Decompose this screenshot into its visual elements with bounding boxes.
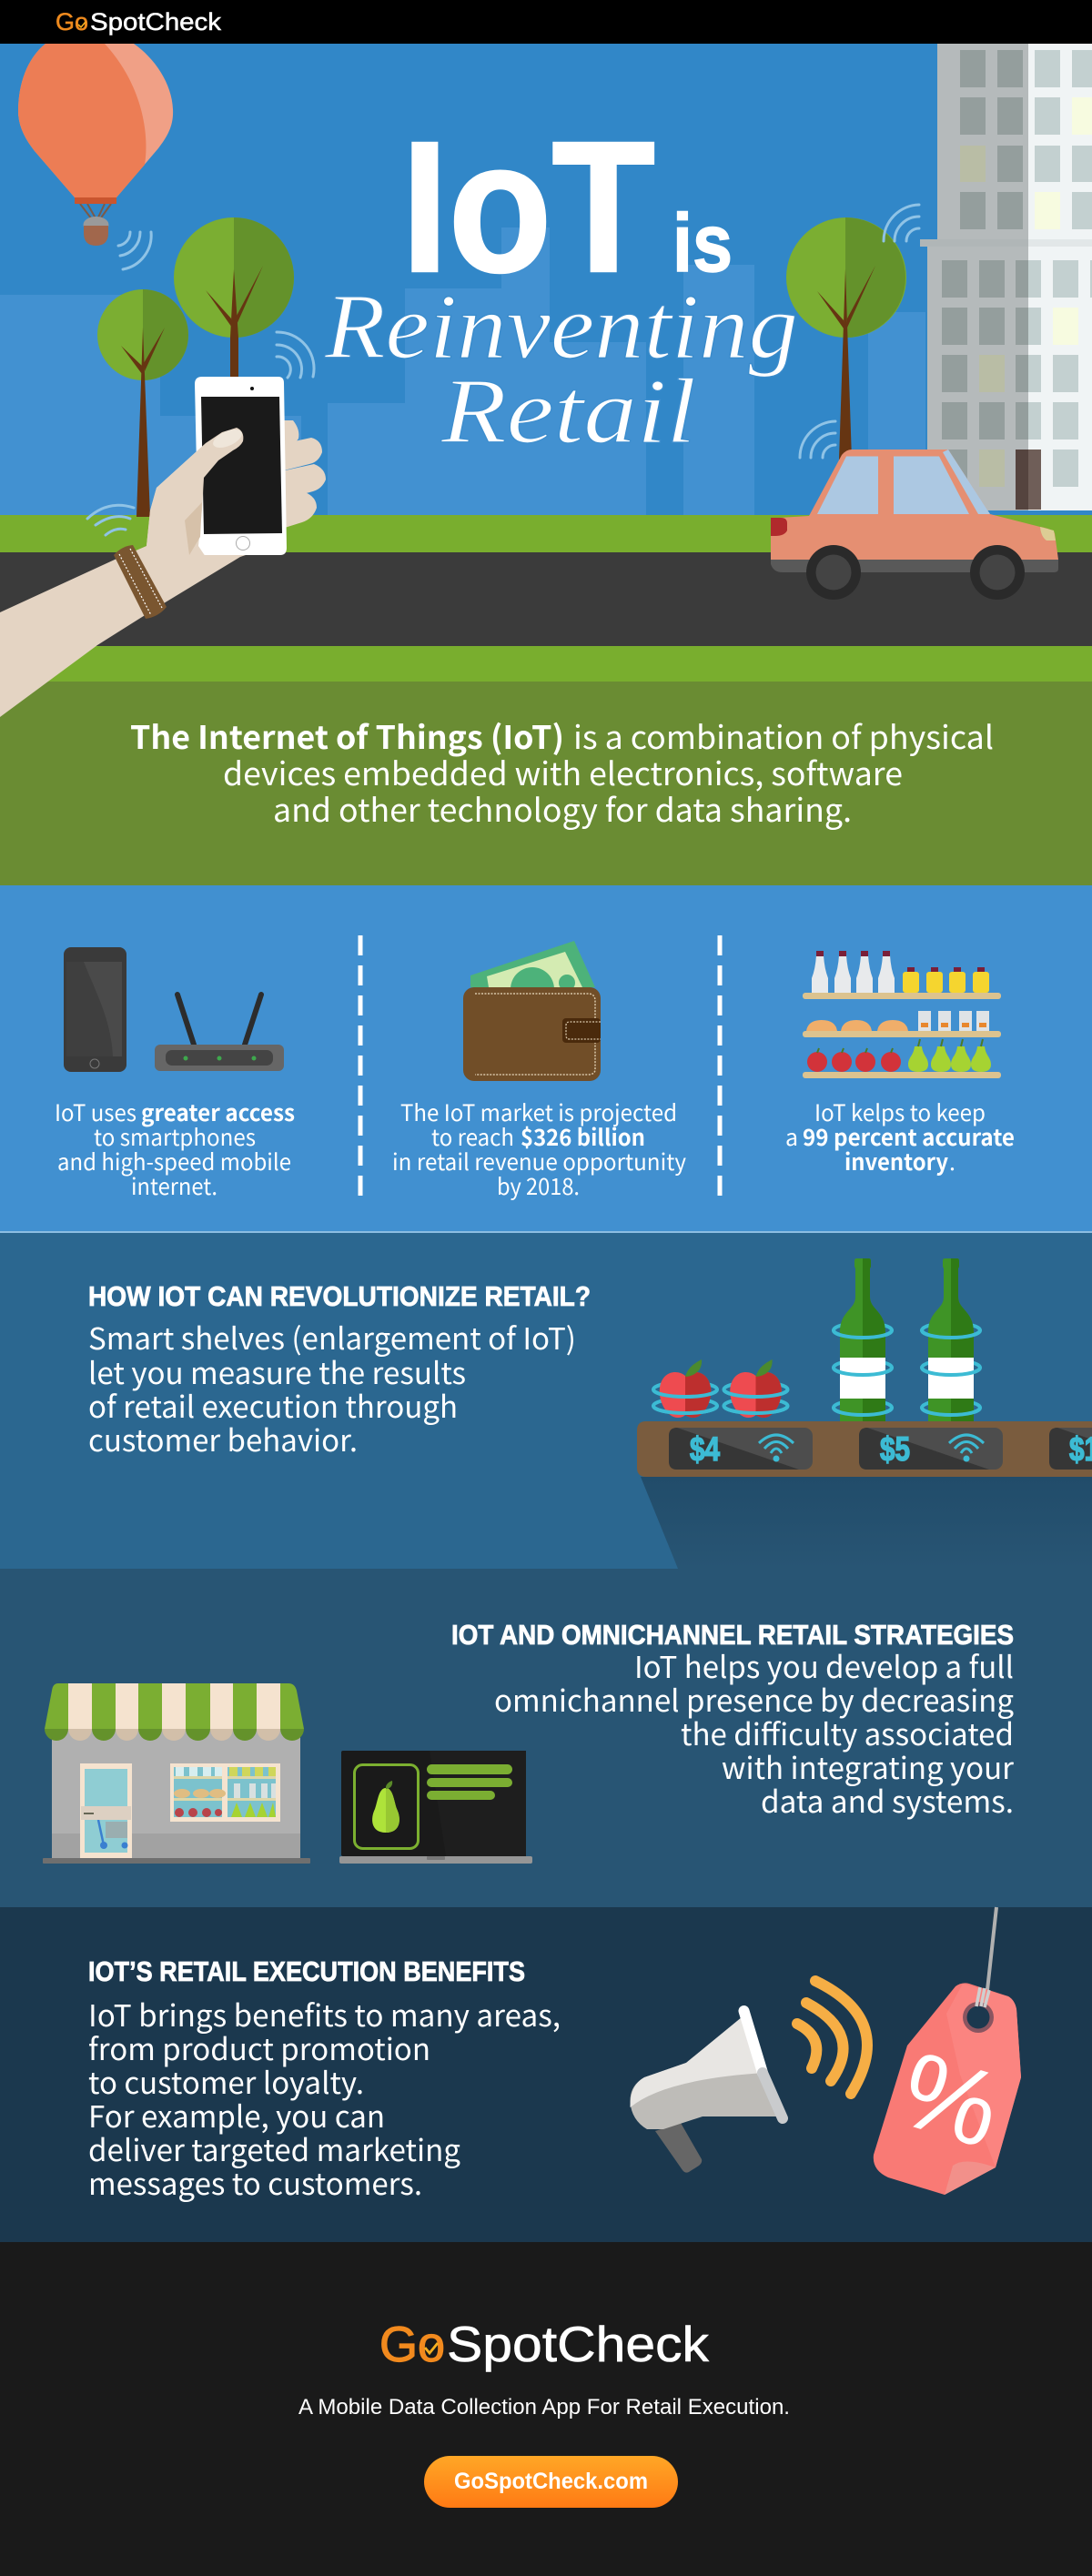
panel: execution benefits <box>0 1907 1092 2242</box>
intro text: devices embedded with electronics, software <box>223 749 903 795</box>
title <box>324 103 798 463</box>
fact 3 text: inventory <box>844 1145 949 1177</box>
fact 1 text: IoT uses <box>55 1096 136 1128</box>
sound waves <box>797 1981 867 2094</box>
panel: smart shelves <box>0 1233 1092 1569</box>
button: website: GoSpotCheck.com <box>454 2469 648 2494</box>
section body: Smart shelves (enlargement of IoT) <box>88 1315 576 1359</box>
arm and fingers <box>0 420 326 717</box>
price tag 4 dollars <box>669 1428 813 1470</box>
fact 3 text: . <box>949 1145 956 1177</box>
smartphone <box>195 377 287 555</box>
fact 3 text: 99 percent accurate <box>803 1120 1015 1153</box>
price tag 4 dollars: $4 <box>690 1430 720 1468</box>
shelf shadow <box>641 1477 1092 1569</box>
price tag clipped <box>1049 1428 1092 1470</box>
building <box>920 44 1092 510</box>
button: website <box>424 2456 678 2508</box>
tree left small <box>97 289 188 517</box>
section body: deliver targeted marketing <box>88 2126 460 2170</box>
bottle one <box>834 1258 892 1421</box>
section body: For example, you can <box>88 2093 385 2137</box>
section body: the difficulty associated <box>681 1711 1014 1754</box>
fact 2 text: in retail revenue opportunity <box>392 1145 686 1177</box>
fact 3 text <box>785 1096 1015 1177</box>
fact 1 text: internet. <box>131 1169 217 1202</box>
intro text: and other technology for data sharing. <box>273 785 852 832</box>
icon: laptop with product listing <box>339 1751 532 1864</box>
section body: with integrating your <box>722 1744 1014 1788</box>
background city skyline <box>0 227 925 515</box>
section body <box>88 1992 561 2204</box>
intro text <box>130 712 994 832</box>
fact 1 text <box>55 1096 295 1202</box>
intro text: The Internet of Things (IoT) <box>130 712 564 759</box>
section body: data and systems. <box>761 1778 1014 1822</box>
icon: stocked shelves <box>803 951 1001 1078</box>
fact 1 text: to smartphones <box>94 1120 256 1153</box>
panel: footer <box>0 2242 1092 2576</box>
pear <box>372 1781 399 1833</box>
car <box>771 450 1058 600</box>
section body: IoT helps you develop a full <box>634 1643 1014 1687</box>
section body: customer behavior. <box>88 1417 358 1460</box>
icon: phone and router <box>64 947 284 1072</box>
title: Reinventing <box>324 276 798 379</box>
panel: three facts <box>0 885 1092 1233</box>
shelf board <box>637 1421 1092 1477</box>
section heading: IOT AND OMNICHANNEL RETAIL STRATEGIES <box>451 1619 1014 1651</box>
hot air balloon <box>18 44 173 246</box>
rim <box>744 2011 763 2073</box>
intro text: is a combination of physical <box>573 712 994 759</box>
grass strip <box>0 515 1092 552</box>
section body: IoT brings benefits to many areas, <box>88 1992 561 2036</box>
section body <box>88 1315 576 1460</box>
lower grass strip <box>0 646 1092 682</box>
fact 3 text: IoT kelps to keep <box>814 1096 986 1128</box>
section body: of retail execution through <box>88 1383 458 1427</box>
handle <box>655 2123 702 2173</box>
fact 1 text: greater access <box>141 1096 295 1128</box>
percent sign: % <box>887 2029 1014 2172</box>
fact 2 text: The IoT market is projected <box>400 1096 677 1128</box>
icon: wallet with money <box>463 941 601 1081</box>
panel: intro definition <box>0 682 1092 885</box>
tree left big <box>174 217 294 387</box>
road <box>0 552 1092 646</box>
smart shelf with products <box>637 1258 1092 1477</box>
section body: let you measure the results <box>88 1349 466 1393</box>
fact 2 text: by 2018. <box>497 1169 580 1202</box>
section heading: IOT’S RETAIL EXECUTION BENEFITS <box>88 1955 525 1987</box>
section body: from product promotion <box>88 2025 430 2069</box>
apple two <box>724 1359 788 1418</box>
fact 1 text: and high-speed mobile <box>57 1145 291 1177</box>
wrist band <box>114 545 167 619</box>
title: Retail <box>440 360 696 463</box>
hand holding smartphone <box>0 377 326 717</box>
section body <box>494 1643 1014 1822</box>
logo small: Go <box>56 8 88 35</box>
section body: omnichannel presence by decreasing <box>494 1677 1014 1721</box>
panel: omnichannel <box>0 1569 1092 1907</box>
section heading: HOW IOT CAN REVOLUTIONIZE RETAIL? <box>88 1280 591 1312</box>
fact 2 text <box>392 1096 686 1202</box>
column dividers <box>360 935 720 1197</box>
price tag 5 dollars: $5 <box>880 1430 910 1468</box>
fact 2 text: to reach <box>431 1120 514 1153</box>
icon: storefront <box>43 1683 310 1864</box>
tree right <box>786 217 906 460</box>
wifi signals <box>87 205 919 535</box>
apple one <box>653 1359 717 1418</box>
fact 3 text: a <box>785 1120 798 1153</box>
panel: top logo bar <box>0 0 1092 44</box>
awning <box>45 1683 304 1741</box>
footer logo: Go <box>379 2316 445 2372</box>
icon: megaphone <box>630 1981 867 2173</box>
shop window <box>170 1763 280 1822</box>
horn <box>630 2017 777 2129</box>
bottle two <box>922 1258 980 1421</box>
icon: discount tag <box>874 1907 1021 2195</box>
title: IoT <box>401 103 655 311</box>
tagline: A Mobile Data Collection App For Retail Execution. <box>298 2395 790 2419</box>
price tag 5 dollars <box>859 1428 1003 1470</box>
fact 2 text: $326 billion <box>521 1120 645 1153</box>
panel: hero scene <box>0 44 1092 717</box>
logo small: SpotCheck <box>90 8 222 35</box>
door <box>80 1763 132 1858</box>
section body: to customer loyalty. <box>88 2059 364 2103</box>
title: is <box>672 198 733 289</box>
thumb and palm <box>147 428 243 582</box>
footer logo: SpotCheck <box>447 2316 710 2372</box>
section body: messages to customers. <box>88 2160 422 2204</box>
